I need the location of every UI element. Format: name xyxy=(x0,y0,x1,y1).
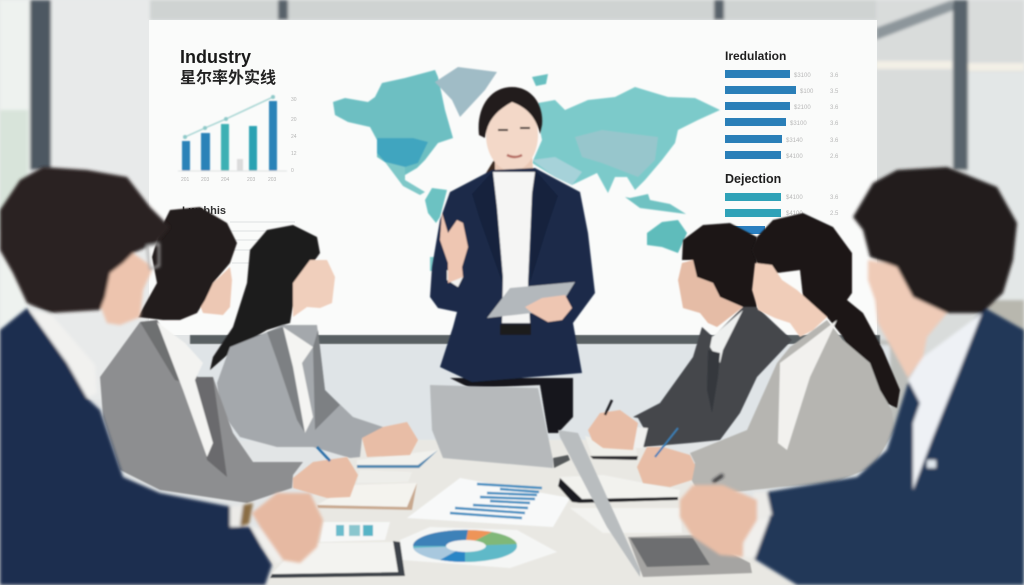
attendee 3 lapel xyxy=(267,327,305,433)
horizontal bars: regulation: 3.6 xyxy=(830,138,839,144)
attendee 5 face xyxy=(752,263,827,337)
north america xyxy=(333,70,453,175)
attendee 6 shirt xyxy=(908,313,982,490)
central asia xyxy=(575,130,658,177)
horizontal bars: regulation: $2100 xyxy=(794,105,811,111)
right attendee 4 xyxy=(588,223,792,450)
greenland xyxy=(435,67,497,117)
horizontal bars: regulation: 2.6 xyxy=(830,154,839,160)
right attendee 6 xyxy=(680,167,1024,585)
attendee 1 hair xyxy=(0,167,170,313)
left panel heading: 星尔率外实线 xyxy=(180,68,276,87)
pie chart document xyxy=(400,527,557,568)
united states xyxy=(377,138,428,167)
horizontal bars: regulation: $3100 xyxy=(790,121,807,127)
bar chart axis labels: 12 xyxy=(291,151,297,157)
regulation panel heading: Iredulation xyxy=(725,49,786,63)
horizontal bars: regulation: $100 xyxy=(800,89,814,95)
attendee 6 cuffs xyxy=(753,492,772,520)
attendee 3 suit xyxy=(217,325,383,458)
attendee 6 pocket square xyxy=(927,460,936,468)
attendee 1 glasses xyxy=(147,244,159,269)
horizontal bars: regulation: 3.6 xyxy=(830,121,839,127)
horizontal bars: dejection: 3.6 xyxy=(830,195,839,201)
left attendee 1 xyxy=(0,167,323,585)
attendee 6 hair xyxy=(853,167,1017,313)
attendee 4 hair xyxy=(682,223,757,307)
presenter ponytail xyxy=(483,155,497,178)
attendee 4 suit xyxy=(633,307,792,447)
horizontal bars: regulation: $3140 xyxy=(786,138,803,144)
faint text lines xyxy=(230,222,295,263)
table xyxy=(240,436,810,585)
right documents xyxy=(557,475,680,503)
bar chart xyxy=(178,95,287,171)
horizontal bars: dejection: 2.5 xyxy=(830,211,839,217)
south america xyxy=(425,188,447,223)
presenter raised hand xyxy=(440,213,468,283)
right laptop xyxy=(558,430,752,577)
attendee 4 tie xyxy=(707,350,720,413)
bar chart axis labels: 30 xyxy=(291,97,297,103)
attendee 3 hands xyxy=(362,422,418,457)
attendee 1 watch xyxy=(240,503,253,526)
attendee 4 cuff xyxy=(633,427,648,448)
dejection panel heading: Dejection xyxy=(725,172,781,186)
bar chart axis labels: 204 xyxy=(221,177,230,183)
attendee 2 shirt xyxy=(157,322,213,457)
presenter tablet xyxy=(487,282,575,318)
clipboard xyxy=(270,541,405,578)
horizontal bars: regulation: $3100 xyxy=(794,73,811,79)
right attendee 5 xyxy=(637,213,900,493)
bar chart axis labels: 203 xyxy=(247,177,256,183)
presenter trousers xyxy=(450,378,573,433)
australia xyxy=(647,220,687,253)
presenter belt xyxy=(500,324,531,335)
horizontal bars: regulation: 3.6 xyxy=(830,73,839,79)
attendee 2 suit xyxy=(100,320,303,503)
left attendee 2 xyxy=(100,207,358,503)
horizontal bars: regulation: 3.6 xyxy=(830,105,839,111)
attendee 2 face xyxy=(197,267,232,315)
attendee 6 hands xyxy=(680,485,757,557)
southeast asia islands xyxy=(625,194,686,214)
bar chart axis labels: 0 xyxy=(291,168,294,174)
left notebooks xyxy=(317,483,417,507)
attendee 6 face xyxy=(868,260,947,378)
small teal card xyxy=(320,522,390,542)
attendee 4 shirt xyxy=(710,310,743,363)
lower left panel heading: Lwcbhis xyxy=(182,205,226,217)
projection screen xyxy=(149,20,880,344)
horizontal bars: regulation: 3.5 xyxy=(830,89,839,95)
middle east xyxy=(532,157,582,185)
attendee 6 suit xyxy=(753,308,1024,585)
attendee 2 hand xyxy=(293,457,358,498)
presenter jacket xyxy=(430,168,595,382)
left attendee 3 xyxy=(210,225,418,458)
attendee 5 shirt xyxy=(778,320,837,450)
world map xyxy=(333,67,720,271)
horizontal bars: regulation: $4100 xyxy=(786,154,803,160)
attendee 5 hair and ponytail xyxy=(752,213,900,408)
horizontal bars: dejection: $4100 xyxy=(786,195,803,201)
left panel heading: Industry xyxy=(180,47,251,67)
horizontal bars: dejection: $4100 xyxy=(786,211,803,217)
left panel heading xyxy=(180,47,276,87)
attendee 5 suit xyxy=(690,320,895,493)
center document with blue bars xyxy=(407,478,570,527)
bar chart axis labels: 203 xyxy=(201,177,210,183)
attendee 2 hair xyxy=(138,207,237,320)
attendee 3 shirt xyxy=(283,327,313,433)
screen bottom bezel xyxy=(190,335,880,344)
attendee 4 hand xyxy=(588,410,638,450)
bar chart axis labels xyxy=(181,97,297,183)
presenter neck xyxy=(495,155,534,205)
attendee 1 shirt xyxy=(30,310,97,398)
central america xyxy=(385,162,425,195)
attendee 5 hand xyxy=(637,447,695,487)
attendee 3 face xyxy=(293,260,335,317)
attendee 4 face xyxy=(678,260,743,327)
attendee 1 suit xyxy=(0,308,272,585)
presenter shirt xyxy=(493,172,535,323)
presenter holding hand xyxy=(525,295,572,322)
eurasia xyxy=(532,87,720,193)
bar chart axis labels: 201 xyxy=(181,177,190,183)
attendee 2 lapel xyxy=(193,377,227,477)
attendee 1 hands xyxy=(252,493,323,563)
bar chart axis labels: 24 xyxy=(291,134,297,140)
attendee 1 cuff xyxy=(230,505,243,527)
horizontal bars: dejection xyxy=(725,193,839,234)
horizontal bars: regulation xyxy=(725,70,839,160)
presenter hair xyxy=(479,87,542,138)
presenter lapels xyxy=(472,172,502,282)
bar chart axis labels: 203 xyxy=(268,177,277,183)
presenter face xyxy=(486,99,538,171)
presenter xyxy=(430,87,595,433)
attendee 3 hair xyxy=(210,225,320,370)
attendee 1 face xyxy=(100,253,152,325)
attendee 1 lower cuff xyxy=(250,525,285,564)
bar chart axis labels: 20 xyxy=(291,117,297,123)
presenter cuff xyxy=(447,270,463,287)
center laptop xyxy=(430,385,570,468)
